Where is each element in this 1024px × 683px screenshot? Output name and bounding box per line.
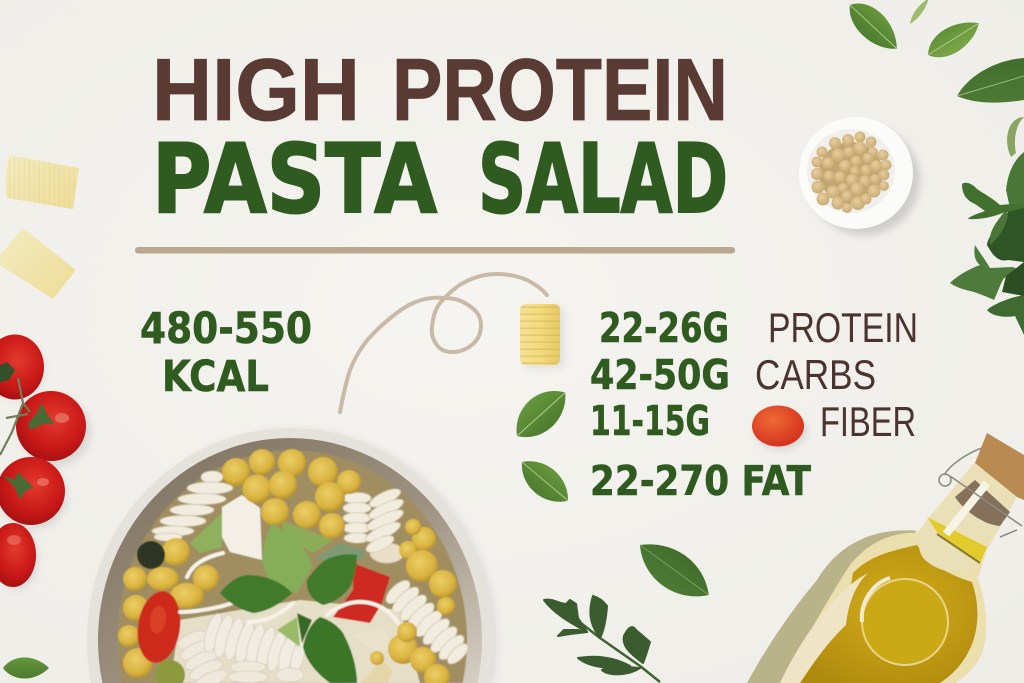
lettuce	[190, 513, 365, 647]
tomatoes on vine	[0, 334, 91, 590]
tomato wedge	[333, 563, 390, 623]
icon: basil leaf lower center	[629, 530, 719, 611]
icon: small leaf bottom left	[3, 658, 49, 678]
neck	[919, 462, 1017, 571]
icon: leaf top right	[921, 12, 986, 66]
clasp	[939, 447, 1022, 537]
fusilli bottom center	[173, 610, 393, 683]
icon: bowl of soybeans	[799, 117, 920, 235]
cheese cube	[222, 495, 262, 560]
bottle glass	[780, 520, 987, 683]
curly pasta strand	[340, 274, 547, 412]
protein row: PROTEIN	[768, 304, 918, 351]
protein row	[599, 304, 918, 352]
nutrition list	[590, 304, 918, 505]
cork	[975, 433, 1024, 500]
title	[152, 40, 728, 235]
tomato 1	[0, 334, 45, 401]
cloth	[747, 530, 917, 683]
basil leaves	[220, 523, 357, 683]
title line: high protein: HIGH	[152, 40, 360, 139]
icon: tomato near fiber	[752, 406, 807, 450]
icon: rigatoni middle left	[0, 228, 76, 299]
fat row: 22-270 FAT	[590, 457, 811, 505]
tomato 2	[16, 391, 91, 466]
title line: pasta salad: SALAD	[478, 125, 728, 235]
title line: high protein	[152, 40, 728, 139]
calories: 480-550	[140, 304, 312, 354]
fiber row: FIBER	[820, 398, 916, 445]
icon: basil leaf lower	[512, 451, 577, 512]
fiber row: 11-15G	[590, 397, 710, 445]
neck shadow	[955, 480, 1010, 526]
icon: leaf top left	[841, 0, 907, 59]
protein row: 22-26G	[599, 304, 729, 352]
icon: leaf sliver top	[910, 0, 929, 24]
onion strands	[180, 553, 398, 623]
icon: parsley sprig bottom	[544, 596, 660, 682]
icon: rigatoni piece	[520, 304, 564, 368]
calories	[140, 304, 312, 402]
icon: large leaf right	[957, 58, 1024, 103]
icon: basil leaf upper	[505, 379, 576, 448]
inner disc	[862, 578, 948, 665]
reflection	[780, 573, 868, 683]
fusilli right lower	[381, 575, 474, 670]
fiber row	[590, 397, 916, 445]
title line: pasta salad: PASTA	[152, 125, 437, 235]
icon: rigatoni top left	[6, 155, 79, 209]
olives	[137, 541, 185, 683]
vine	[0, 378, 30, 455]
calories: KCAL	[162, 352, 269, 402]
chickpeas	[118, 449, 457, 683]
straw reflection	[946, 483, 987, 534]
fusilli top left	[152, 471, 233, 541]
tomato 4	[0, 523, 38, 590]
fusilli top right	[343, 485, 406, 563]
cherry tomato half	[133, 588, 185, 666]
title line: high protein: PROTEIN	[392, 40, 728, 139]
carbs row	[590, 351, 876, 399]
carbs row: 42-50G	[590, 351, 730, 399]
carbs row: CARBS	[755, 351, 876, 398]
bowl rim	[87, 428, 497, 683]
icon: parsley bunch right	[950, 117, 1024, 335]
pasta salad bowl	[87, 428, 497, 683]
title line: pasta salad	[152, 125, 728, 235]
tomato 3	[0, 457, 67, 529]
salad contents	[117, 449, 474, 683]
oil	[800, 545, 977, 683]
oil band in neck	[927, 517, 987, 563]
salad base	[117, 450, 467, 683]
olive oil bottle	[747, 433, 1024, 683]
